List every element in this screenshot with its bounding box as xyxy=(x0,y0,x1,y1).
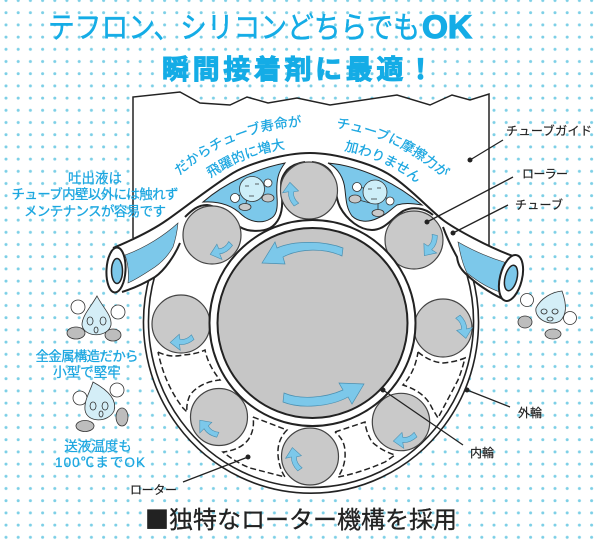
left caption: discharge: チューブ内壁以外には触れず xyxy=(12,186,178,202)
left caption: discharge: メンテナンスが容易です xyxy=(24,203,166,219)
leader lines xyxy=(183,140,513,482)
left caption: discharge xyxy=(12,171,178,219)
title xyxy=(48,9,472,85)
curved caption: no friction: 加わりません xyxy=(344,140,418,182)
tube fluid pocket: left xyxy=(203,163,285,222)
label: tube guide: チューブガイド xyxy=(506,123,592,138)
left caption: temperature xyxy=(55,439,145,470)
label: tube: チューブ xyxy=(515,197,563,212)
label: outer ring: 外輪 xyxy=(518,406,542,420)
label: rotor: ローター xyxy=(130,483,177,497)
character: drop 1 xyxy=(67,296,125,341)
dashed rotor outline xyxy=(158,350,465,477)
character: drop 3 xyxy=(518,291,576,339)
right tube opening xyxy=(458,242,527,303)
tube guide panel xyxy=(133,92,489,250)
left caption: temperature: 送液温度も xyxy=(64,439,132,454)
character: drop 2 xyxy=(73,382,128,432)
left caption: all metal: 小型で堅牢 xyxy=(53,365,121,380)
title: 瞬間接着剤に最適！ xyxy=(162,55,434,85)
character in right pocket xyxy=(349,180,394,216)
curved caption: tube life: 飛躍的に増大 xyxy=(206,138,285,178)
title: テフロン、シリコンどちらでも xyxy=(48,12,420,45)
curved caption: no friction: チューブに摩擦力が xyxy=(338,118,450,175)
rollers xyxy=(152,162,472,485)
left caption: all metal xyxy=(36,349,138,380)
character in left pocket xyxy=(230,176,274,210)
left caption: discharge: 吐出液は xyxy=(68,171,122,186)
title: OK xyxy=(422,9,472,45)
left caption: all metal: 全金属構造だから xyxy=(36,349,138,364)
outer ring xyxy=(144,151,478,493)
left caption: temperature: 100℃までOK xyxy=(55,455,145,470)
tube fluid pocket: right xyxy=(328,163,422,221)
tube body xyxy=(113,153,513,299)
left tube opening xyxy=(105,223,178,293)
label: roller: ローラー xyxy=(522,167,568,181)
label: inner ring: 内輪 xyxy=(470,446,494,460)
big rotation arrow: bottom xyxy=(283,383,364,406)
roller rotation arrows xyxy=(169,181,475,473)
bottom heading: ■独特なローター機構を採用 xyxy=(145,500,457,535)
curved caption: tube life: だからチューブ寿命が xyxy=(174,114,301,175)
big rotation arrow: top xyxy=(262,242,343,264)
inner ring xyxy=(210,220,416,426)
